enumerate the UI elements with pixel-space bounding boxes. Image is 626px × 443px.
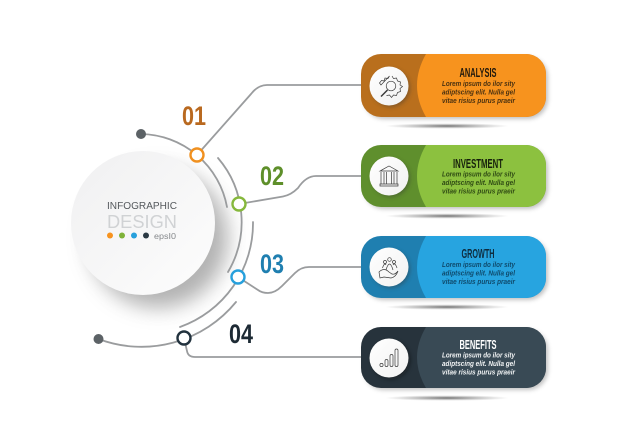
number 04: 04 xyxy=(229,319,253,349)
node 2 xyxy=(232,198,246,210)
colored dots xyxy=(107,232,149,238)
benefits body: adiptscing elit. Nulla gel xyxy=(442,359,516,368)
number 01: 01 xyxy=(182,101,206,131)
investment body: vitae risius purus praeir xyxy=(442,186,516,196)
investment title: INVESTMENT xyxy=(453,157,503,171)
arc 2 xyxy=(218,158,242,272)
panel: investment xyxy=(361,145,548,219)
investment body: Lorem ipsum do ilor sity xyxy=(442,170,516,178)
end dot top xyxy=(136,129,146,139)
icon: gear with magnifier xyxy=(380,76,402,98)
panel: central circle xyxy=(71,151,228,308)
number 03: 03 xyxy=(260,249,284,279)
growth body xyxy=(442,260,516,286)
circle title: infographic: INFOGRAPHIC xyxy=(107,201,177,212)
analysis body: Lorem ipsum do ilor sity xyxy=(442,79,516,88)
node 3 xyxy=(232,270,244,284)
panel: growth xyxy=(361,236,548,310)
end dot bottom xyxy=(94,334,104,344)
eps label: epsI0 xyxy=(154,231,176,241)
circle title: design: DESIGN xyxy=(107,212,177,232)
number 02: 02 xyxy=(260,161,284,191)
node 4 xyxy=(178,332,190,344)
connector 4 xyxy=(184,338,361,357)
benefits body: vitae risius purus praeir xyxy=(442,368,516,376)
benefits title: BENEFITS xyxy=(460,338,496,352)
connector 1 xyxy=(197,85,361,155)
investment body xyxy=(442,170,516,196)
analysis body xyxy=(442,79,516,105)
investment body: adiptscing elit. Nulla gel xyxy=(442,178,516,187)
arc 3 xyxy=(180,222,253,327)
analysis body: vitae risius purus praeir xyxy=(442,96,516,105)
growth body: Lorem ipsum do ilor sity xyxy=(442,260,516,269)
arc 1 xyxy=(141,134,227,207)
benefits body: Lorem ipsum do ilor sity xyxy=(442,350,516,360)
analysis title: ANALYSIS xyxy=(460,66,496,80)
analysis body: adiptscing elit. Nulla gel xyxy=(442,88,516,96)
icon: people in hand xyxy=(379,258,398,278)
panel: analysis xyxy=(361,54,548,129)
node 1 xyxy=(190,148,204,162)
growth body: vitae risius purus praeir xyxy=(442,277,516,286)
benefits body xyxy=(442,350,516,376)
growth title: GROWTH xyxy=(462,247,494,261)
growth body: adiptscing elit. Nulla gel xyxy=(442,268,516,278)
icon: bank xyxy=(380,166,398,186)
connector 2 xyxy=(239,176,361,204)
panel: benefits xyxy=(361,327,548,401)
arc 4 xyxy=(98,302,236,347)
connector 3 xyxy=(238,267,361,293)
icon: bar chart xyxy=(380,349,398,367)
